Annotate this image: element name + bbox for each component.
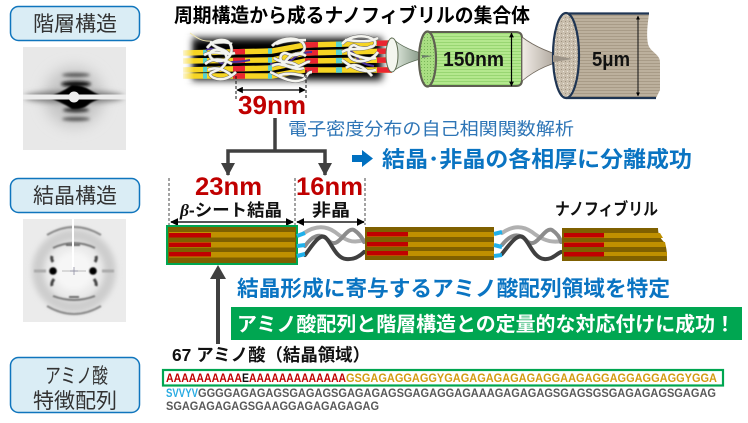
text: autocorrelation analysis: 電子密度分布の自己相関関数解析	[288, 119, 574, 139]
label: amino acid sequence: 特徴配列	[33, 390, 117, 413]
sequence: following residues: SGAGAGAGAGSGAAGGAGAGAGAGAG	[166, 399, 379, 413]
sequence: following residues: GGGGAGAGAGSGAGAGSGAGAGAGSGAGAGGAGAAAGAGAGAGSGAGSGSGAGAGAGSGAGAG	[198, 386, 716, 400]
sequence: crystal region box: AAAAAAAAAA	[166, 371, 242, 385]
label: hierarchical structure: 階層構造	[33, 13, 117, 36]
arrow: sequence to crystal	[210, 265, 226, 344]
title: 周期構造から成るナノフィブリルの集合体	[174, 4, 530, 27]
illustration: 5 micron fibre: 5μm	[592, 49, 630, 71]
sequence: crystal region box	[163, 370, 723, 386]
diffraction image: SAXS pattern	[23, 47, 126, 150]
label: amino acid sequence	[10, 358, 140, 413]
dimension: 16 nm amorphous: 16nm	[296, 173, 363, 201]
label: amino acid sequence: アミノ酸	[45, 365, 108, 388]
label: crystal structure: 結晶構造	[33, 185, 117, 208]
label: crystal structure	[10, 178, 140, 212]
dimension: 16 nm amorphous: 非晶	[312, 201, 350, 220]
sequence: crystal region box: AAAAAAAAAAAAA	[249, 371, 346, 385]
sequence: crystal region box: E	[242, 371, 249, 385]
dimension: 23 nm beta-sheet crystal: 23nm	[195, 173, 262, 201]
sequence: following residues	[166, 386, 716, 413]
dimension: 23 nm beta-sheet crystal: β-シート結晶	[179, 201, 282, 220]
dimension: 23 nm beta-sheet crystal	[169, 173, 295, 225]
illustration: periodic nanofibril	[180, 33, 433, 83]
sequence: following residues: SVVYV	[166, 386, 198, 400]
sequence: crystal region box: GSGAGAGGAGGYGAGAGAGAGAGAGGAAGAGGAGGAGGAGGYGGA	[346, 371, 717, 385]
callout: quantitative mapping success	[231, 307, 742, 340]
dimension: 39 nm period: 39nm	[238, 90, 306, 120]
nanofibril: crystal block 2	[365, 227, 494, 260]
illustration: 5 micron fibre	[522, 13, 660, 98]
tangled amorphous chains	[204, 36, 378, 81]
small cone	[392, 38, 433, 72]
diffraction image: WAXS pattern	[23, 219, 126, 322]
amorphous chains 1	[297, 227, 364, 259]
nanofibril: highlighted crystal block	[167, 226, 297, 264]
illustration: 150 nm fibril cylinder	[419, 32, 522, 86]
heading: 67 amino acids: 67 アミノ酸（結晶領域）	[172, 345, 370, 365]
text: identify sequence region: 結晶形成に寄与するアミノ酸配列領域を特定	[237, 277, 670, 301]
callout: quantitative mapping success: アミノ酸配列と階層構造との定量的な対応付けに成功！	[237, 312, 735, 336]
result callout: phase separation: 結晶･非晶の各相厚に分離成功	[382, 147, 692, 172]
illustration: 150 nm fibril cylinder: 150nm	[443, 49, 504, 71]
nanofibril: crystal block 3 torn end	[562, 228, 667, 261]
label: hierarchical structure	[10, 6, 140, 40]
dimension: 39 nm period	[236, 70, 306, 120]
dimension: 16 nm amorphous	[296, 173, 365, 225]
amorphous chains 2	[494, 227, 561, 259]
label: nanofibril: ナノフィブリル	[555, 199, 658, 219]
arrow: branch to crystal and amorphous	[221, 118, 332, 176]
